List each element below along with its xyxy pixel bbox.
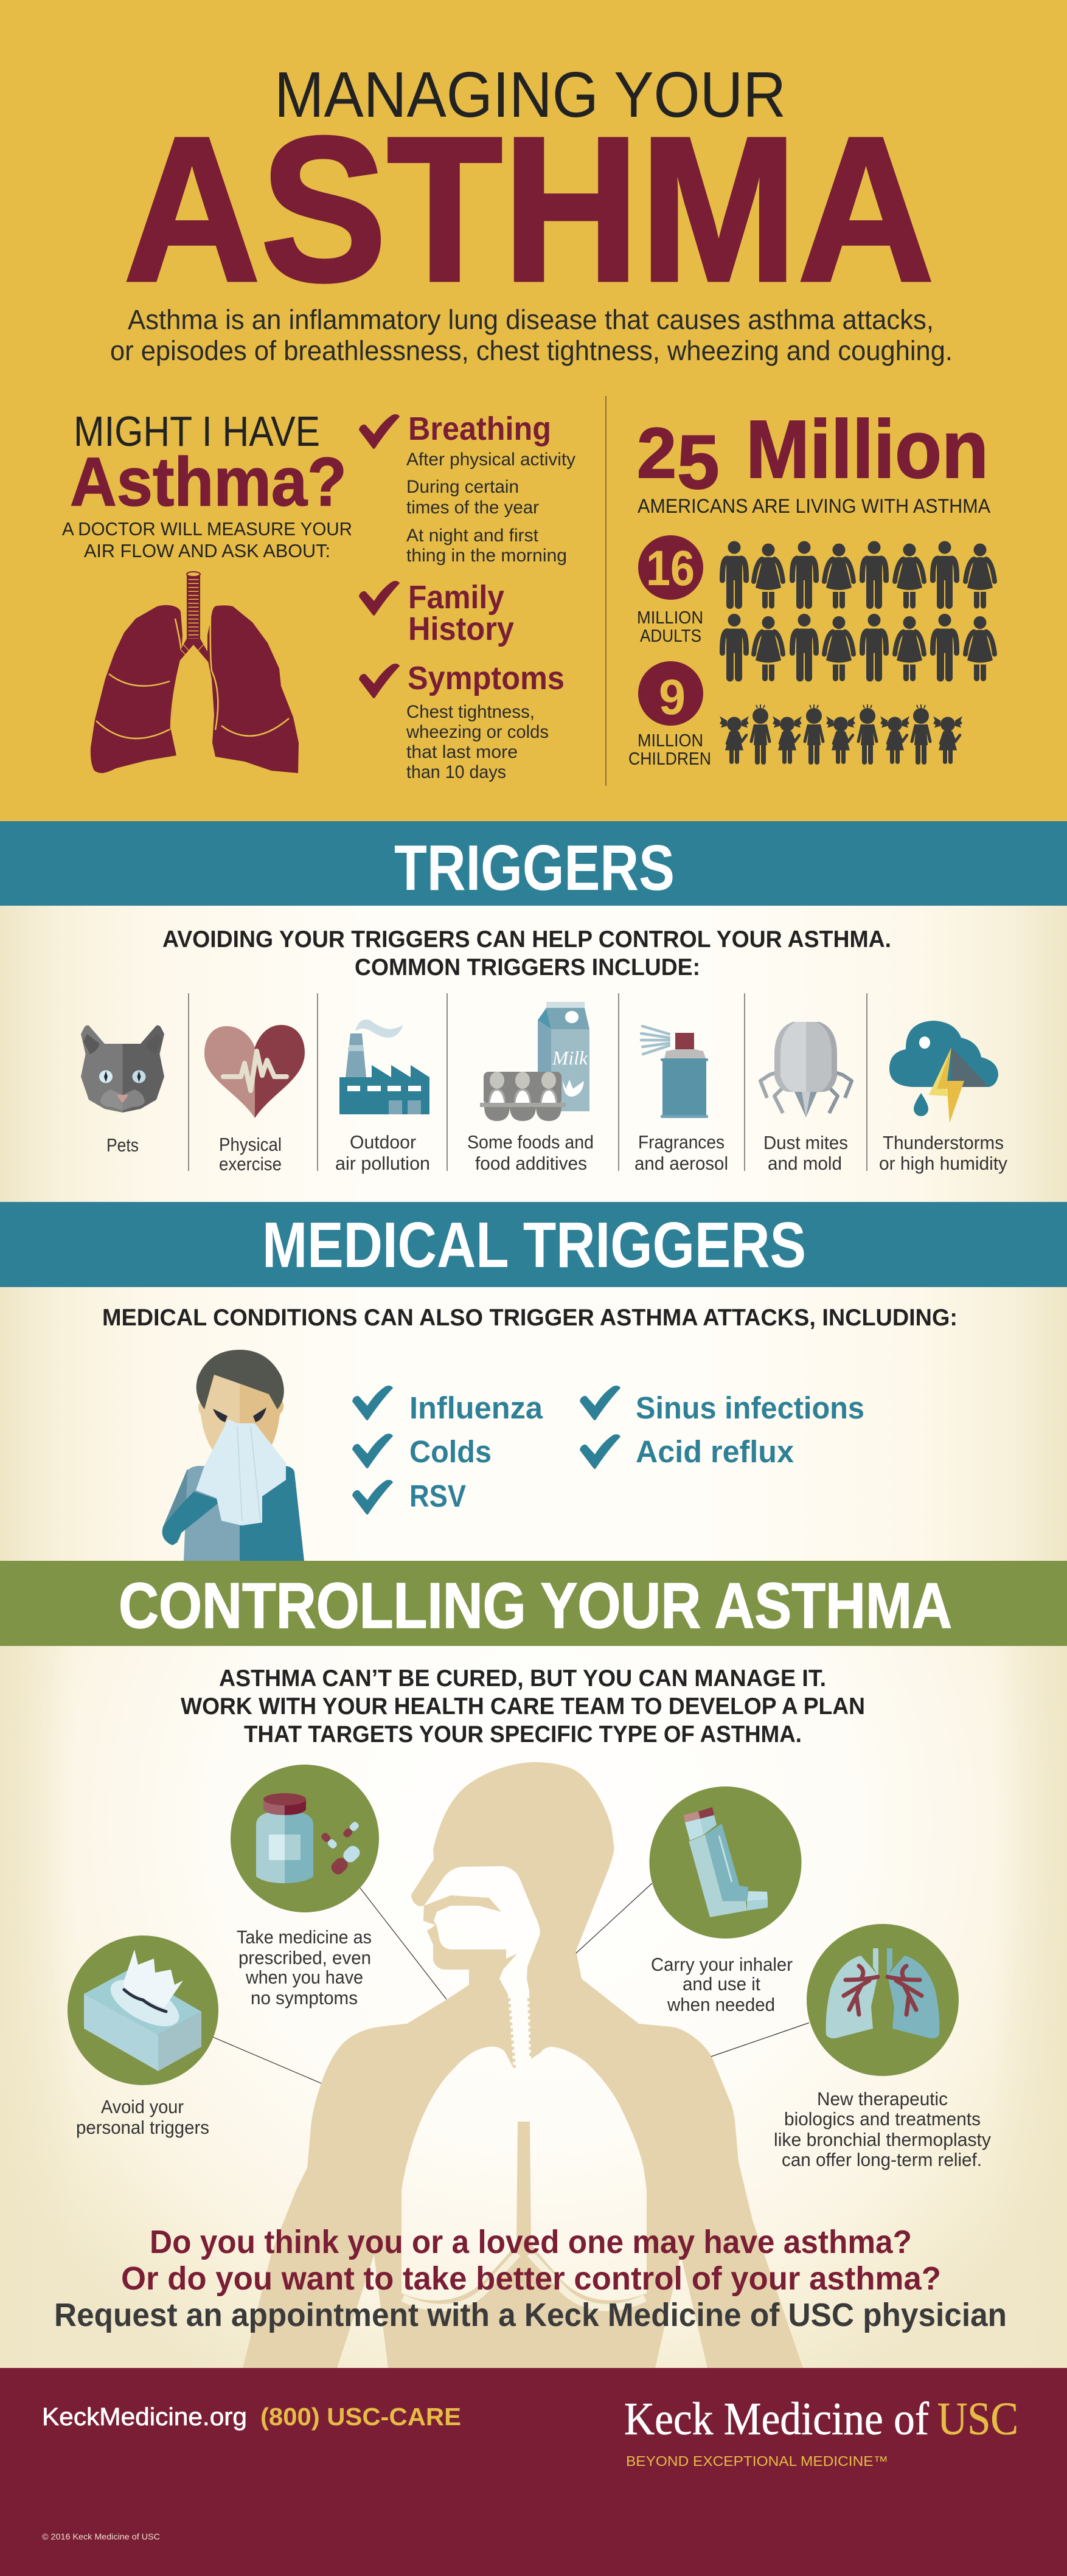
icon: lungs	[91, 572, 299, 773]
illustration: body silhouette with airways	[243, 1762, 803, 2368]
statistic: 9 million children: MILLION	[638, 731, 703, 751]
logo: Keck Medicine of USC: Keck Medicine of	[624, 2394, 930, 2445]
callout: avoid triggers: personal triggers	[76, 2117, 209, 2138]
label: outdoor air pollution: Outdoor	[350, 1131, 416, 1153]
checklist: breathing: During certain	[406, 477, 519, 497]
statistic: 25 million: 5	[677, 420, 720, 505]
copyright: © 2016 Keck Medicine of USC	[42, 2532, 160, 2541]
checklist: family history	[359, 579, 514, 647]
callout: carry inhaler	[576, 1786, 802, 2015]
illustration: person sneezing into tissue	[162, 1350, 304, 1561]
controlling intro text	[181, 1665, 865, 1748]
checklist: medical conditions: Sinus infections	[636, 1390, 864, 1425]
contact details	[42, 2403, 461, 2431]
controlling intro text: ASTHMA CAN’T BE CURED, BUT YOU CAN MANAGE IT.	[219, 1665, 826, 1692]
callout: take medicine	[231, 1765, 447, 2008]
panel: controlling your asthma	[0, 1646, 1067, 2369]
checklist: medical conditions	[352, 1386, 864, 1515]
panel: footer	[0, 2368, 1067, 2576]
callout: carry inhaler: Carry your inhaler	[651, 1954, 793, 1975]
label: outdoor air pollution: air pollution	[335, 1153, 430, 1174]
heading: might I have asthma	[62, 408, 352, 561]
statistic: 9 million children: CHILDREN	[628, 749, 711, 769]
checklist: family history: Family	[408, 579, 504, 616]
call to action text: Request an appointment with a Keck Medicine of USC physician	[54, 2297, 1007, 2333]
statistic: 25 million: AMERICANS ARE LIVING WITH ASTHMA	[638, 495, 991, 517]
logo: Keck Medicine of USC	[624, 2394, 1018, 2469]
intro text: Asthma is an inflammatory lung disease that causes asthma attacks,	[128, 304, 934, 335]
checklist: medical conditions: Colds	[409, 1434, 492, 1469]
icon: heart	[204, 1025, 305, 1118]
call to action text: Do you think you or a loved one may have asthma?	[150, 2224, 912, 2260]
statistic: 25 million: Million	[746, 403, 989, 495]
statistic: 16 million adults: 16	[646, 541, 695, 596]
intro text	[110, 304, 953, 366]
title: ASTHMA	[123, 94, 934, 324]
label: dust mites and mold: and mold	[768, 1153, 842, 1174]
label: some foods and food additives: Some foods and	[467, 1131, 594, 1153]
label: thunderstorms or high humidity: or high humidity	[879, 1153, 1007, 1174]
panel: yellow header background	[0, 0, 1067, 821]
checklist: medical conditions: Acid reflux	[636, 1434, 794, 1469]
checklist: symptoms: that last more	[406, 742, 518, 762]
callout: take medicine: no symptoms	[251, 1987, 358, 2008]
label: fragrances and aerosol: Fragrances	[638, 1131, 725, 1153]
statistic: 9 million children: 9	[659, 670, 686, 725]
label: thunderstorms or high humidity	[879, 1132, 1007, 1174]
heading bar: medical triggers: MEDICAL TRIGGERS	[262, 1209, 806, 1281]
medical intro text: MEDICAL CONDITIONS CAN ALSO TRIGGER ASTHMA ATTACKS, INCLUDING:	[102, 1305, 958, 1331]
controlling intro text: WORK WITH YOUR HEALTH CARE TEAM TO DEVELOP A PLAN	[181, 1693, 865, 1720]
icon: milk and eggs: Milk	[552, 1047, 588, 1069]
statistic: 25 million: 2	[637, 413, 676, 493]
callout: take medicine: Take medicine as	[237, 1926, 372, 1948]
checklist: symptoms: than 10 days	[406, 762, 506, 782]
checklist: symptoms: Chest tightness,	[406, 702, 535, 722]
heading bar: medical triggers	[0, 1202, 1067, 1287]
icon: milk and eggs	[480, 1002, 589, 1121]
checklist: symptoms: Symptoms	[408, 660, 565, 696]
label: fragrances and aerosol: and aerosol	[634, 1153, 728, 1174]
controlling intro text: THAT TARGETS YOUR SPECIFIC TYPE OF ASTHMA.	[244, 1721, 802, 1748]
pictogram: adults	[722, 541, 995, 681]
statistic: 25 million	[637, 403, 991, 517]
label: outdoor air pollution	[335, 1131, 430, 1174]
callout: new treatments	[711, 1924, 991, 2170]
label: pets: Pets	[106, 1134, 139, 1156]
icon: dust mite	[760, 1022, 852, 1117]
title: MANAGING YOUR	[274, 59, 786, 131]
label: dust mites and mold	[763, 1132, 848, 1174]
checklist: breathing	[359, 411, 575, 566]
callout: carry inhaler: and use it	[683, 1973, 760, 1994]
checklist: symptoms: wheezing or colds	[406, 722, 549, 742]
label: fragrances and aerosol	[634, 1131, 728, 1174]
checklist: breathing: times of the year	[406, 498, 539, 518]
heading: might I have asthma: Asthma?	[70, 443, 347, 520]
triggers intro text: AVOIDING YOUR TRIGGERS CAN HELP CONTROL YOUR ASTHMA.	[162, 926, 891, 953]
heading bar: triggers: TRIGGERS	[394, 832, 675, 904]
checklist: breathing: Breathing	[408, 411, 551, 447]
call to action text	[54, 2224, 1007, 2333]
heading bar: triggers	[0, 821, 1067, 906]
label: physical exercise: Physical	[219, 1134, 282, 1155]
icon: storm cloud	[889, 1021, 998, 1123]
pictogram: children	[720, 704, 962, 765]
label: dust mites and mold: Dust mites	[763, 1132, 848, 1153]
statistic: 9 million children	[628, 661, 711, 769]
callout: avoid triggers: Avoid your	[101, 2096, 184, 2117]
logo: Keck Medicine of USC: USC	[937, 2394, 1018, 2445]
checklist: symptoms	[359, 660, 565, 782]
checklist: family history: History	[408, 611, 514, 647]
panel: medical triggers	[0, 1287, 1067, 1561]
icon: factory	[339, 1019, 429, 1114]
callout: new treatments: New therapeutic	[817, 2088, 948, 2109]
label: physical exercise: exercise	[219, 1153, 282, 1175]
callout: carry inhaler: when needed	[667, 1994, 775, 2015]
callout: new treatments: biologics and treatments	[784, 2108, 981, 2130]
icon: cat	[81, 1026, 164, 1113]
checklist: breathing: After physical activity	[406, 450, 575, 470]
callout: take medicine: when you have	[245, 1967, 363, 1988]
call to action text: Or do you want to take better control of your asthma?	[121, 2260, 941, 2297]
callout: new treatments: like bronchial thermoplasty	[774, 2129, 991, 2150]
checklist: medical conditions: RSV	[409, 1479, 466, 1513]
triggers intro text	[162, 926, 891, 981]
statistic: 16 million adults: ADULTS	[640, 627, 701, 646]
callout: avoid triggers	[68, 1935, 321, 2138]
logo: Keck Medicine of USC: BEYOND EXCEPTIONAL MEDICINE™	[626, 2453, 888, 2469]
heading: might I have asthma: AIR FLOW AND ASK ABOUT:	[84, 540, 330, 561]
contact details: KeckMedicine.org	[42, 2403, 247, 2431]
heading: might I have asthma: A DOCTOR WILL MEASURE YOUR	[62, 518, 352, 540]
label: some foods and food additives	[467, 1131, 594, 1174]
heading: might I have asthma: MIGHT I HAVE	[74, 408, 320, 455]
callout: new treatments: can offer long-term relief.	[782, 2149, 982, 2170]
icon: aerosol can	[641, 1026, 708, 1118]
triggers intro text: COMMON TRIGGERS INCLUDE:	[355, 954, 700, 981]
label: physical exercise	[219, 1134, 282, 1175]
label: thunderstorms or high humidity: Thunderstorms	[883, 1132, 1004, 1153]
statistic: 16 million adults	[637, 535, 703, 646]
label: some foods and food additives: food additives	[475, 1153, 587, 1174]
statistic: 16 million adults: MILLION	[637, 608, 703, 628]
callout: take medicine: prescribed, even	[238, 1947, 371, 1968]
panel: triggers	[0, 906, 1067, 1202]
checklist: breathing: At night and first	[406, 526, 539, 546]
checklist: breathing: thing in the morning	[406, 546, 567, 566]
intro text: or episodes of breathlessness, chest tightness, wheezing and coughing.	[110, 335, 953, 366]
checklist: medical conditions: Influenza	[409, 1390, 543, 1425]
heading bar: controlling your asthma: CONTROLLING YOUR ASTHMA	[119, 1570, 952, 1642]
contact details: (800) USC-CARE	[260, 2403, 461, 2431]
